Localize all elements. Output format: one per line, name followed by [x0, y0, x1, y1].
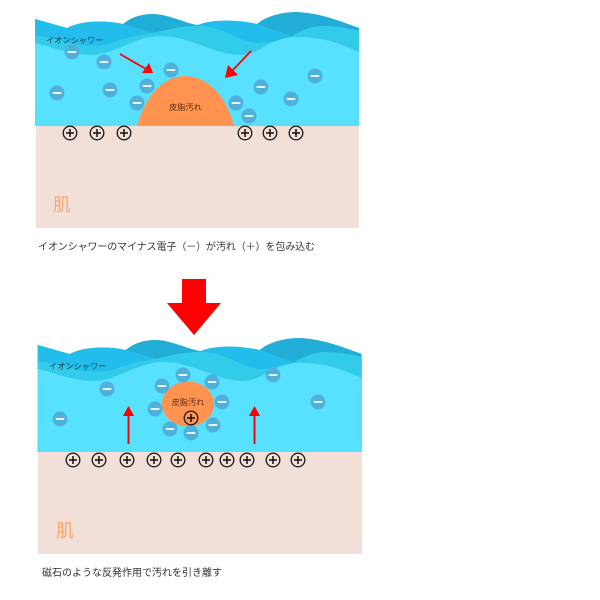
label: skin: 肌 [56, 521, 74, 541]
sebum dirt blob [162, 382, 214, 426]
arrow: big down [167, 279, 221, 335]
skin layer [38, 452, 362, 554]
sebum dirt dome [137, 76, 234, 126]
label: skin: 肌 [53, 195, 71, 215]
positive charges [66, 453, 305, 467]
negative ions [52, 368, 326, 440]
sebum dirt blob: 皮脂汚れ [172, 397, 204, 407]
water body [38, 338, 362, 452]
caption: before: イオンシャワーのマイナス電子（－）が汚れ（＋）を包み込む [38, 240, 315, 253]
skin layer [36, 126, 359, 228]
caption: after: 磁石のような反発作用で汚れを引き離す [42, 566, 222, 579]
negative ions [50, 44, 322, 124]
water body [35, 12, 359, 126]
label: ion shower: イオンシャワー [49, 362, 106, 371]
panel: before [35, 12, 359, 228]
arrow: ions toward dirt right [225, 51, 251, 78]
panel: after [38, 338, 362, 554]
positive charges [63, 126, 303, 140]
arrow: repulsion left [123, 406, 134, 444]
label: ion shower: イオンシャワー [46, 36, 103, 45]
arrow: ions toward dirt left [120, 54, 153, 73]
sebum dirt dome: 皮脂汚れ [169, 102, 202, 112]
arrow: repulsion right [249, 406, 260, 444]
